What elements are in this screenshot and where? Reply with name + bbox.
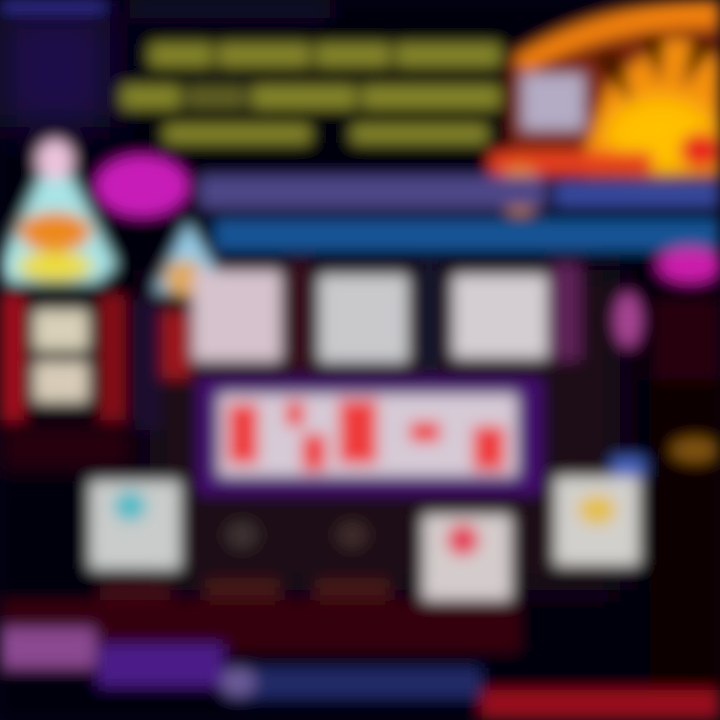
top row cards bbox=[193, 264, 580, 362]
floor bbox=[0, 600, 720, 720]
paytable panel bbox=[198, 378, 542, 494]
second slot machine bbox=[154, 222, 228, 378]
sunburst banner bbox=[490, 0, 720, 214]
left slot machine bbox=[0, 140, 188, 420]
right slot machine bbox=[615, 248, 720, 690]
dim middle items bbox=[100, 521, 390, 600]
subtitle bands bbox=[200, 176, 720, 250]
title bbox=[122, 44, 500, 143]
bottom cards bbox=[90, 457, 644, 611]
